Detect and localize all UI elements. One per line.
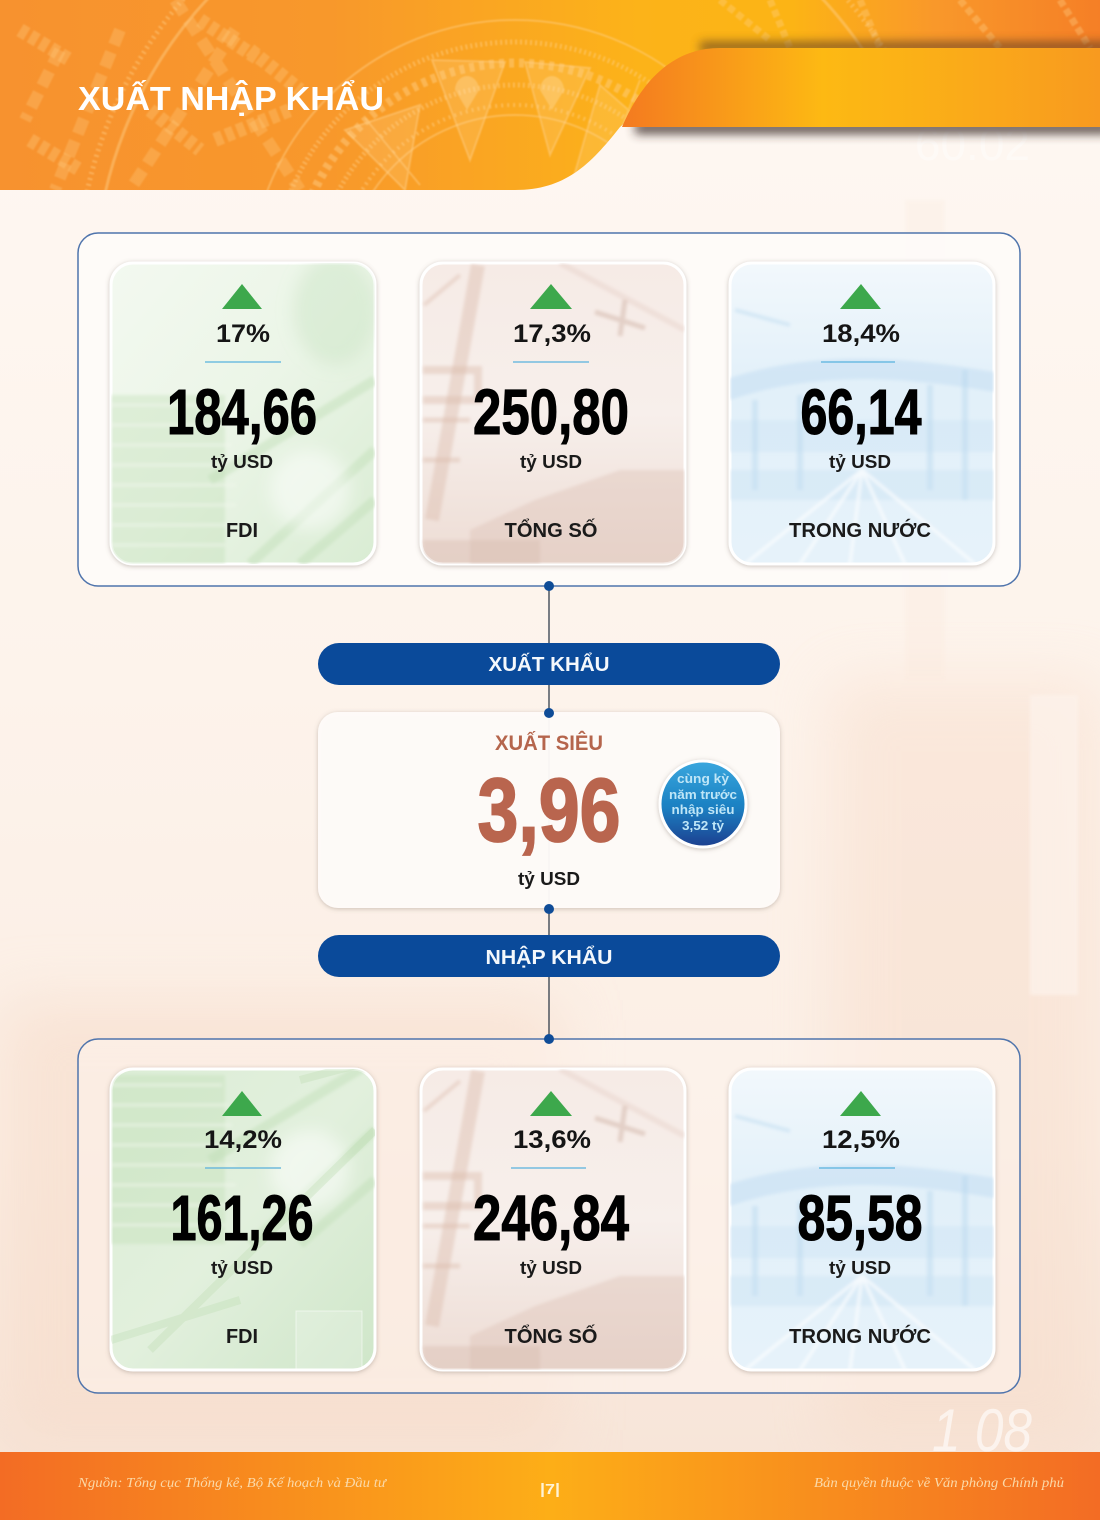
card: export domestic: tỷ USD bbox=[829, 452, 891, 472]
panel: imports bbox=[77, 1034, 1021, 1394]
card: export total: 250,80 bbox=[473, 376, 629, 448]
panel: exports bbox=[78, 233, 1020, 591]
pill: exports heading bbox=[318, 643, 780, 685]
card: import FDI bbox=[107, 1066, 379, 1375]
card: export total: TỔNG SỐ bbox=[504, 518, 598, 542]
card: import FDI: FDI bbox=[226, 1326, 258, 1348]
card: import domestic: tỷ USD bbox=[829, 1258, 891, 1278]
pill: exports heading: XUẤT KHẨU bbox=[488, 653, 610, 676]
card: import domestic: TRONG NƯỚC bbox=[789, 1324, 931, 1348]
header ribbon band bbox=[622, 48, 1100, 127]
card: export total bbox=[421, 263, 685, 564]
badge: previous year deficit: cùng kỳ bbox=[677, 772, 729, 786]
card: import domestic: 85,58 bbox=[798, 1182, 922, 1254]
badge: previous year deficit: năm trước bbox=[669, 788, 737, 802]
card: export total: tỷ USD bbox=[520, 452, 582, 472]
source note: Nguồn: Tổng cục Thống kê, Bộ Kế hoạch và Đầu tư bbox=[77, 1476, 387, 1491]
card: import FDI: 14,2% bbox=[204, 1126, 282, 1154]
card: export domestic: TRONG NƯỚC bbox=[789, 518, 931, 542]
card: import FDI: 161,26 bbox=[170, 1182, 314, 1254]
panel: trade surplus: tỷ USD bbox=[518, 869, 580, 889]
card: import domestic bbox=[730, 1069, 994, 1370]
card: export domestic bbox=[730, 263, 994, 564]
card: export FDI: FDI bbox=[226, 520, 258, 542]
panel: trade surplus bbox=[318, 708, 780, 914]
card: export domestic: 66,14 bbox=[800, 376, 922, 448]
card: import total: tỷ USD bbox=[520, 1258, 582, 1278]
card: export FDI: 17% bbox=[216, 320, 270, 348]
footer bar bbox=[0, 1452, 1100, 1520]
card: import total: 13,6% bbox=[513, 1126, 591, 1154]
page title: XUẤT NHẬP KHẨU bbox=[78, 80, 384, 117]
card: export FDI bbox=[111, 255, 377, 564]
page background: 1 08 bbox=[932, 1397, 1033, 1464]
pill: imports heading: NHẬP KHẨU bbox=[486, 945, 612, 969]
copyright note: Bản quyền thuộc về Văn phòng Chính phủ bbox=[814, 1476, 1064, 1491]
card: import total bbox=[421, 1069, 685, 1370]
card: import domestic: 12,5% bbox=[822, 1126, 900, 1154]
page background: 60.02 bbox=[915, 118, 1030, 170]
panel: trade surplus: XUẤT SIÊU bbox=[495, 731, 603, 755]
connector line with dots bbox=[548, 586, 550, 1039]
card: import total: TỔNG SỐ bbox=[504, 1324, 598, 1348]
header banner with bronze-drum pattern bbox=[0, 0, 1100, 190]
card: export FDI: tỷ USD bbox=[211, 452, 273, 472]
badge: previous year deficit: 3,52 tỷ bbox=[682, 819, 724, 833]
card: import FDI: tỷ USD bbox=[211, 1258, 273, 1278]
card: import total: 246,84 bbox=[473, 1182, 629, 1254]
badge: previous year deficit bbox=[660, 761, 746, 847]
panel: trade surplus: 3,96 bbox=[478, 761, 620, 861]
page number: |7| bbox=[540, 1481, 560, 1498]
card: export total: 17,3% bbox=[513, 320, 591, 348]
badge: previous year deficit: nhập siêu bbox=[672, 803, 734, 817]
header ribbon shadow bbox=[635, 42, 1100, 134]
pill: imports heading bbox=[318, 935, 780, 977]
card: export domestic: 18,4% bbox=[822, 320, 900, 348]
card: export FDI: 184,66 bbox=[167, 376, 317, 448]
